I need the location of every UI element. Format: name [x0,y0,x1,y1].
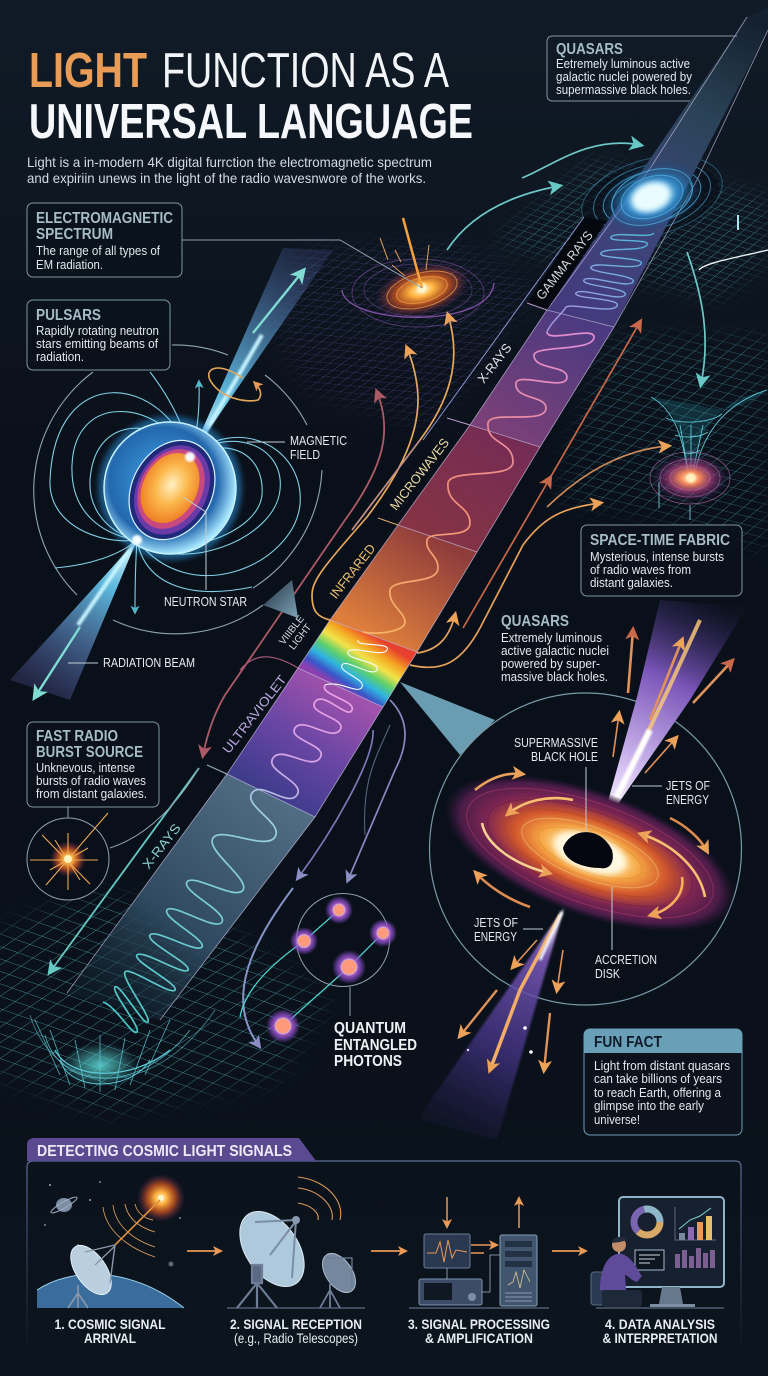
panel: space-time fabric: Mysterious, intense bursts [590,549,724,564]
rotation ring [209,368,261,401]
band segment: ultraviolet [227,668,383,817]
panel: quasars top: Eetremely luminous active [556,56,690,71]
band segment: x-rays lower [67,774,315,1020]
grid: top-right warped fabric [486,148,768,312]
panel: fun fact: universe! [594,1112,640,1127]
step captions: 1. COSMIC SIGNAL [54,1316,166,1332]
title: UNIVERSAL LANGUAGE [29,95,473,149]
step captions: 2. SIGNAL RECEPTION [230,1316,362,1332]
gamma label strip [527,217,606,310]
black hole labels: ACCRETION [595,952,657,967]
spectral wave: gamma [547,233,654,332]
panel: fun fact: glimpse into the early [594,1098,704,1113]
title [29,44,473,149]
magnetic field lines [98,416,242,560]
intro text [27,154,432,186]
panel: pulsars: PULSARS [36,307,101,324]
black hole labels: BLACK HOLE [531,749,598,764]
band edges [67,17,768,1020]
arrow: step 2 to 3 [371,1250,405,1252]
curved arrows: orange, left of spectrum [312,315,454,620]
panel: fun fact [584,1029,742,1135]
step captions: 3. SIGNAL PROCESSING [408,1316,550,1332]
panel: fast radio burst source: bursts of radio waves [36,773,146,788]
step captions: 4. DATA ANALYSIS [605,1316,715,1332]
quasar top vortex [590,147,714,247]
label: visible light: LIGHT [287,622,314,652]
grid: bottom-left teal fabric with funnel [0,870,350,1135]
panel: fast radio burst source: BURST SOURCE [36,744,143,761]
pulsar labels [68,433,347,670]
black hole dome [563,832,613,868]
quantum entangled photons: QUANTUM [334,1020,406,1037]
quantum entangled photons: PHOTONS [334,1053,402,1070]
band segment: infrared [330,525,477,652]
panel: quasars top [547,36,737,101]
pulsar beams [10,248,333,700]
label strip ticks and outer line [207,217,584,774]
panel: fast radio burst source: Unknevous, intense [36,760,135,775]
quantum entangled photons [240,894,417,1070]
beam arrows [35,271,303,697]
title: LIGHT [29,44,147,98]
band segment: microwaves [398,425,540,552]
black hole labels: JETS OF [474,915,518,930]
jet arrows [460,630,732,1070]
panel: pulsars: radiation. [36,349,84,364]
step captions [54,1316,718,1346]
text block: quasars middle: active galactic nuclei [501,643,609,658]
panel: pulsars: stars emitting beams of [36,336,158,351]
step 4: data analysis [591,1197,724,1308]
panel: quasars top: galactic nuclei powered by [556,69,692,84]
teal arrow beside lower x-rays [50,768,199,972]
black hole labels: JETS OF [666,778,710,793]
upper jet [600,600,747,830]
text block: quasars middle: Extremely luminous [501,630,602,645]
band segment: gamma rays [547,8,768,327]
label: visible light: VIIIBLE [277,613,307,647]
band segment: visible light rainbow [298,620,417,707]
black hole circle [430,693,742,1005]
label: x-rays lower: X-RAYS [139,820,184,872]
panel: fast radio burst source [27,722,159,807]
black hole diagram [417,600,754,1140]
panel frame [27,1161,741,1350]
panel: space-time fabric: of radio waves from [590,562,691,577]
band segment: x-rays upper [470,310,614,447]
electromagnetic spectrum band [67,8,768,1020]
black hole labels: DISK [595,966,620,981]
panel: space-time fabric [581,525,742,596]
black hole zoom pointer [400,682,495,755]
curved arrows: violet below ultraviolet [243,700,405,1046]
panel: quasars top: QUASARS [556,41,623,58]
panel: fast radio burst source: FAST RADIO [36,728,118,745]
step captions: (e.g., Radio Telescopes) [234,1330,358,1346]
panel: space-time fabric: SPACE-TIME FABRIC [590,532,730,549]
rotated spectrum labels [139,228,596,872]
black hole labels: ENERGY [666,792,709,807]
black hole labels [474,735,710,981]
black hole labels: ENERGY [474,929,517,944]
text block: quasars middle [501,613,609,684]
panel: electromagnetic spectrum: EM radiation. [36,257,103,272]
pointer triangle to pulsar [263,580,298,618]
neutron star sphere [104,422,236,555]
black hole labels: SUPERMASSIVE [514,735,598,750]
label: microwaves: MICROWAVES [387,435,452,513]
intro text: Light is a in-modern 4K digital furrction the electromagnetic spectrum [27,154,432,170]
panel: fun fact: Light from distant quasars [594,1058,730,1073]
label: ultraviolet: ULTRAVIOLET [219,672,290,756]
step 3: signal processing [409,1197,549,1308]
step captions: ARRIVAL [84,1330,136,1346]
spectral wave: visible light zigzag [325,640,387,689]
pulsar labels: MAGNETIC [290,433,347,448]
label: infrared: INFRARED [327,541,378,601]
orange vortex [369,218,475,327]
panel: electromagnetic spectrum: SPECTRUM [36,226,113,243]
icon: radio burst [27,768,199,900]
title: FUNCTION AS A [162,44,449,98]
label: gamma rays: GAMMA RAYS [533,228,596,303]
pulsar labels: FIELD [290,447,320,462]
section heading tab: DETECTING COSMIC LIGHT SIGNALS [37,1143,292,1160]
curved arrows: rose [203,392,384,755]
curved arrows: teal upper [447,143,768,384]
text block: quasars middle: QUASARS [501,613,569,630]
panel: fun fact: to reach Earth, offering a [594,1085,722,1100]
panel: electromagnetic spectrum [27,203,422,288]
panel: electromagnetic spectrum: The range of all types of [36,243,160,258]
panel: quasars top: supermassive black holes. [556,82,691,97]
lower jet [417,908,564,1140]
step captions: & INTERPRETATION [602,1330,718,1346]
pink vortex [650,452,730,520]
panel: fast radio burst source: from distant galaxies. [36,786,147,801]
label: x-rays: X-RAYS [474,340,515,386]
text block: quasars middle: powered by super- [501,656,600,671]
panel: detecting cosmic light signals [27,1138,741,1350]
panel: fun fact: can take billions of years [594,1071,722,1086]
accretion disk [426,743,754,963]
pulsar labels: NEUTRON STAR [164,594,247,609]
curved arrows: right of spectrum [410,322,668,667]
grid: right teal fabric with funnel [546,320,768,560]
step captions: & AMPLIFICATION [425,1330,533,1346]
step 2: signal reception [227,1177,365,1308]
spectral wave: infrared to x-ray [363,332,594,633]
intro text: and expiriin unews in the light of the radio wavesnwore of the works. [27,170,426,186]
panel: fun fact: FUN FACT [594,1034,662,1051]
arrow: step 1 to 2 [187,1250,220,1252]
pulsar outer ring [34,345,322,634]
step 1: cosmic signal arrival [37,1174,185,1308]
pulsar labels: RADIATION BEAM [103,655,195,670]
disk flow arrows [475,774,707,915]
quantum entangled photons: ENTANGLED [334,1037,417,1054]
panel: space-time fabric: distant galaxies. [590,575,673,590]
arrow: step 3 to 4 [552,1250,585,1252]
grid: centre purple fabric around orange vortex [268,232,540,440]
panel: pulsars: Rapidly rotating neutron [36,323,159,338]
text block: quasars middle: massive black holes. [501,669,608,684]
pulsar diagram [10,248,333,700]
panel: electromagnetic spectrum: ELECTROMAGNETIC [36,210,173,227]
spectral wave: x-ray to ultraviolet [103,685,352,1033]
panel: pulsars [27,300,170,370]
